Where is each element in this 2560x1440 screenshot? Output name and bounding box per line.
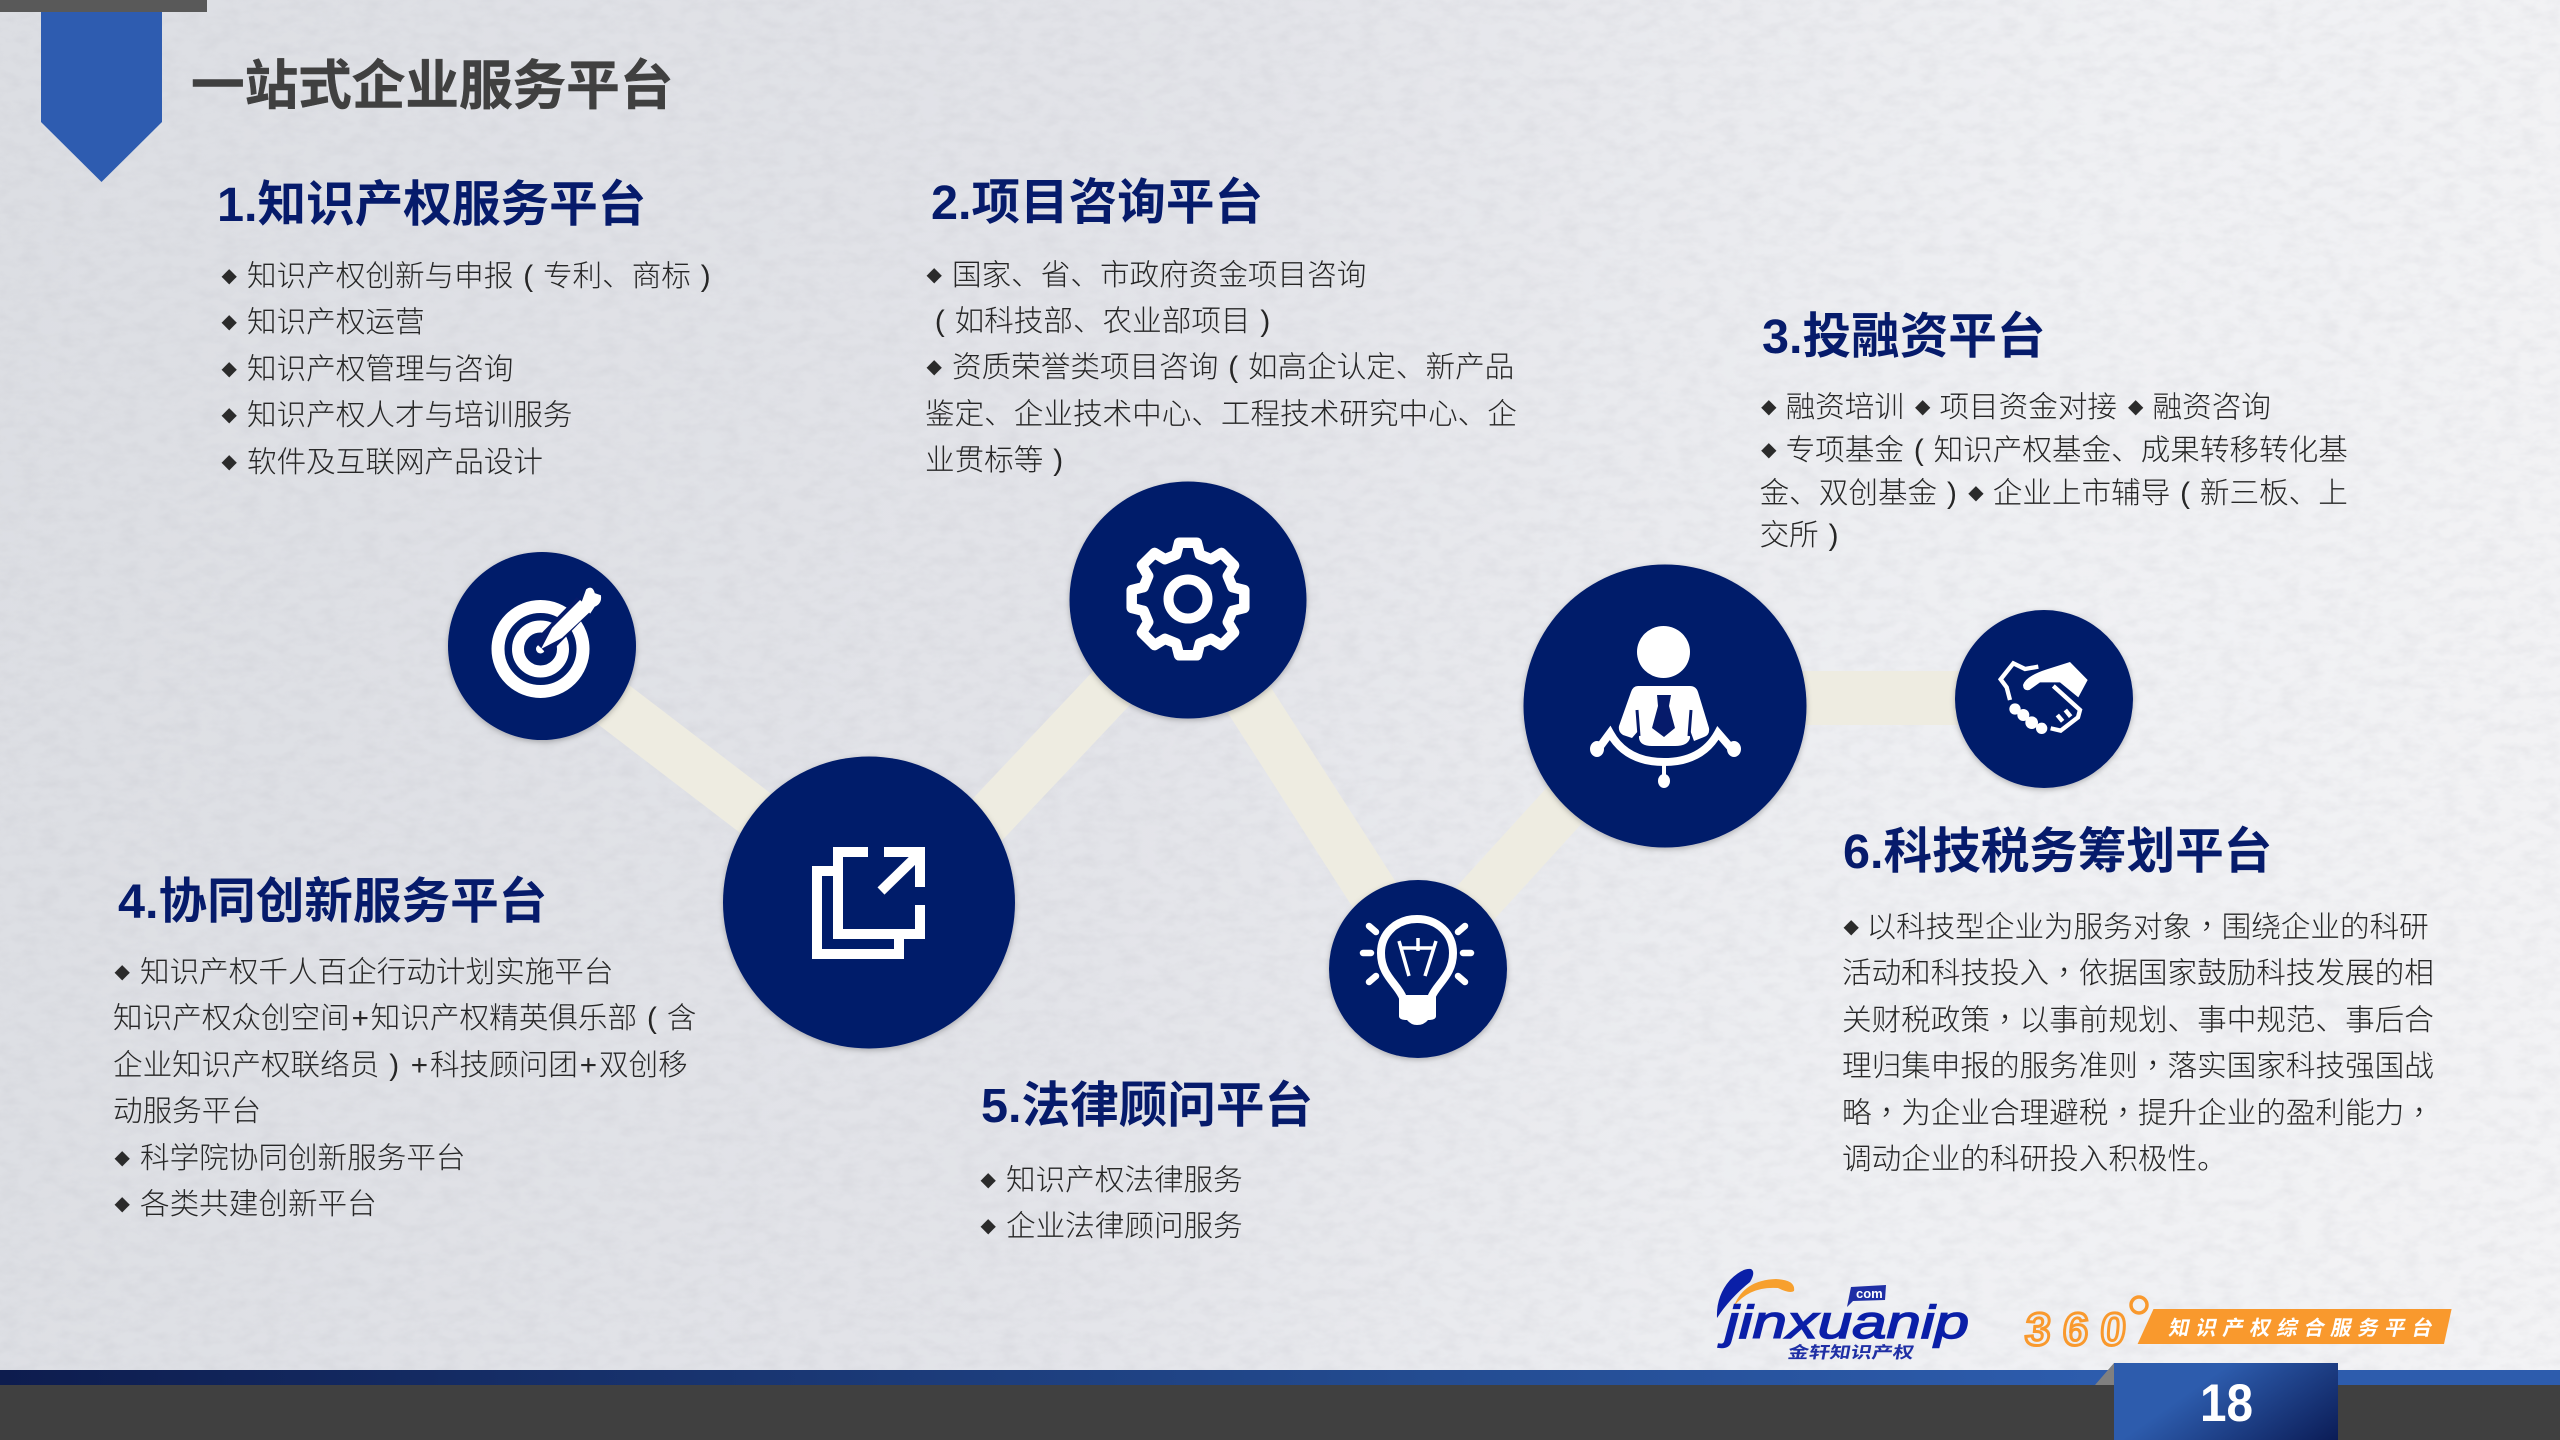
heading 2: 2.项目咨询平台 — [931, 176, 1263, 230]
text block 6: 理归集申报的服务准则 落实国家科技强国战 — [1842, 1050, 2434, 1083]
icon: light bulb — [1363, 919, 1471, 1025]
text block 5 — [980, 1164, 1243, 1243]
text block 3: ) — [1947, 477, 1957, 510]
page number — [2114, 1363, 2338, 1440]
text block 3: 金、双创基金 企业上市辅导 新三板、上 — [1760, 477, 2348, 510]
text block 2: 业贯标等 — [925, 444, 1043, 477]
text block 3: 交所 — [1760, 519, 1819, 552]
text block 3: ◆ — [1761, 437, 1776, 461]
text block 1: ◆ — [222, 263, 237, 287]
text block 1: ◆ — [222, 356, 237, 380]
text block 3 — [1760, 391, 2348, 552]
text block 3: 融资培训 项目资金对接 融资咨询 — [1786, 391, 2271, 424]
logo: jinxuanip: 金轩知识产权 — [1786, 1342, 1916, 1362]
node: handshake — [1955, 610, 2133, 788]
text block 6: 略 为企业合理避税 提升企业的盈利能力 — [1842, 1097, 2404, 1130]
text block 1: 知识产权人才与培训服务 — [247, 399, 573, 432]
text block 6: 活动和科技投入 依据国家鼓励科技发展的相 — [1842, 957, 2434, 990]
text block 3: ( — [1914, 434, 1924, 467]
text block 1 — [222, 260, 711, 479]
text block 2: ( — [935, 305, 945, 338]
logo: jinxuanip: jinxuanip — [1717, 1296, 1969, 1348]
text block 5: 企业法律顾问服务 — [1006, 1210, 1243, 1243]
icon: handshake — [2001, 662, 2088, 734]
text block 4: 各类共建创新平台 — [140, 1188, 377, 1221]
text block 6: ， — [2049, 957, 2079, 990]
text block 4: + — [352, 1002, 369, 1035]
text block 6 — [1842, 911, 2434, 1176]
heading 3: 3.投融资平台 — [1762, 310, 2046, 364]
text block 4: 知识产权千人百企行动计划实施平台 — [140, 956, 614, 989]
text block 4: ◆ — [114, 959, 130, 983]
node: documents — [723, 756, 1015, 1048]
page tab fold — [2095, 1363, 2114, 1385]
node: gear — [1070, 482, 1306, 718]
text block 6: ， — [1872, 1097, 1901, 1130]
text block 2: 国家、省、市政府资金项目咨询 — [952, 258, 1366, 292]
heading 1: 1.知识产权服务平台 — [217, 178, 646, 232]
text block 6: 调动企业的科研投入积极性。 — [1842, 1143, 2227, 1176]
footer blue stripe — [0, 1370, 2560, 1385]
icon: gear — [1132, 543, 1244, 655]
text block 6: ， — [2108, 1097, 2138, 1130]
icon: target with dart — [498, 589, 600, 692]
text block 3: 专项基金 知识产权基金、成果转移转化基 — [1786, 434, 2348, 467]
text block 2: ◆ — [926, 354, 942, 378]
text block 5: 知识产权法律服务 — [1006, 1164, 1243, 1197]
text block 4: + — [580, 1049, 597, 1082]
text block 6: 关财税政策 以事前规划、事中规范、事后合 — [1842, 1004, 2434, 1037]
node: target — [448, 552, 636, 740]
text block 2: 资质荣誉类项目咨询 如高企认定、新产品 — [952, 351, 1514, 384]
icon: person in chair — [1590, 626, 1741, 788]
text block 4: 科学院协同创新服务平台 — [140, 1142, 466, 1175]
logo: 360 service banner: 知识产权综合服务平台 — [2167, 1316, 2442, 1340]
text block 4: 知识产权众创空间 知识产权精英俱乐部 含 — [113, 1002, 696, 1035]
ribbon marker — [41, 12, 162, 182]
text block 1: 软件及互联网产品设计 — [247, 446, 543, 479]
footer band — [0, 1370, 2560, 1440]
text block 6: 以科技型企业为服务对象 围绕企业的科研 — [1866, 911, 2429, 944]
text block 2 — [925, 258, 1517, 477]
icon: export documents — [817, 852, 920, 954]
text block 4: ◆ — [114, 1145, 130, 1169]
logo: 360 service banner — [2023, 1295, 2452, 1350]
text block 4: ) — [389, 1049, 399, 1082]
text block 6: ， — [2404, 1097, 2434, 1130]
text block 1: ( — [523, 260, 533, 293]
text block 1: ◆ — [222, 449, 237, 473]
text block 2: ) — [1260, 305, 1270, 338]
text block 1: ◆ — [222, 402, 237, 426]
text block 4 — [113, 956, 696, 1221]
top bar — [0, 0, 207, 12]
text block 2: ( — [1228, 351, 1238, 384]
text block 4: 动服务平台 — [113, 1095, 261, 1128]
text block 2: ) — [1053, 444, 1063, 477]
node: light bulb — [1329, 880, 1507, 1058]
text block 1: 知识产权运营 — [247, 306, 425, 339]
text block 3: ( — [2180, 477, 2190, 510]
text block 1: ) — [701, 260, 711, 293]
text block 5: ◆ — [980, 1167, 996, 1191]
text block 3: ◆ — [1761, 394, 1776, 418]
text block 1: 知识产权管理与咨询 — [247, 353, 513, 386]
text block 3: ◆ — [1968, 480, 1984, 504]
text block 4: ( — [647, 1002, 657, 1035]
heading 6: 6.科技税务筹划平台 — [1843, 825, 2272, 879]
text block 4: 企业知识产权联络员 科技顾问团 双创移 — [113, 1049, 688, 1082]
connector lines — [542, 600, 2044, 969]
text block 6: ， — [1990, 1004, 2020, 1037]
text block 3: ◆ — [2128, 394, 2143, 418]
text block 4: + — [411, 1049, 428, 1082]
heading 4: 4.协同创新服务平台 — [118, 874, 547, 928]
text block 6: ， — [2192, 911, 2222, 944]
text block 1: 知识产权创新与申报 专利、商标 — [247, 260, 691, 293]
node: person — [1524, 564, 1806, 848]
page number: 18 — [2200, 1374, 2253, 1433]
text block 4: ◆ — [114, 1191, 130, 1215]
heading 5: 5.法律顾问平台 — [981, 1078, 1313, 1132]
text block 5: ◆ — [980, 1213, 996, 1237]
text block 1: ◆ — [222, 309, 237, 333]
logo: jinxuanip — [1716, 1268, 1969, 1362]
text block 2: 如科技部、农业部项目 — [955, 305, 1251, 338]
text block 3: ◆ — [1915, 394, 1930, 418]
text block 6: ， — [2138, 1050, 2168, 1083]
text block 2: ◆ — [926, 262, 942, 286]
title: 一站式企业服务平台 — [191, 56, 673, 116]
logo: jinxuanip: com — [1856, 1286, 1883, 1301]
text block 3: ) — [1829, 519, 1838, 552]
text block 6: ◆ — [1844, 914, 1859, 938]
text block 2: 鉴定、企业技术中心、工程技术研究中心、企 — [925, 398, 1517, 431]
